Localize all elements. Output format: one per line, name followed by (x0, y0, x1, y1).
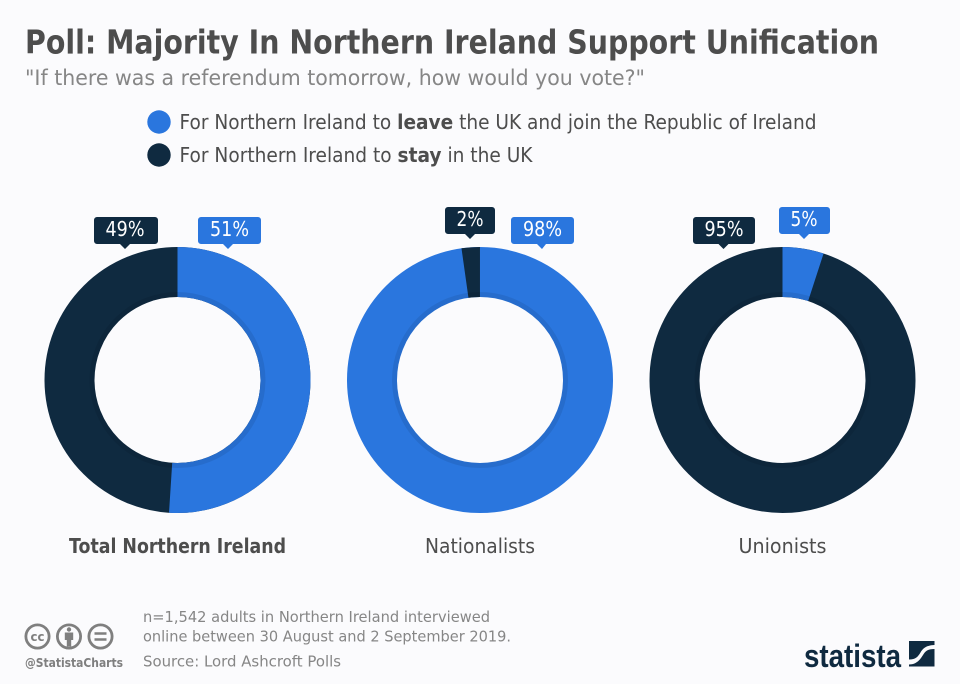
label: 5%: 5% (790, 207, 818, 231)
donut: Total Northern Ireland (69, 217, 286, 558)
legend item: stay: For Northern Ireland to stay in the UK (180, 143, 533, 167)
label: 5% (779, 207, 830, 239)
legend (147, 110, 817, 167)
source: Source: Lord Ashcroft Polls (143, 652, 341, 670)
note: online between 30 August and 2 September 2019. (143, 628, 511, 646)
label: 95% (693, 217, 755, 249)
logo mark (909, 641, 934, 666)
label: 2% (445, 207, 495, 239)
donut: Unionists (674, 207, 890, 558)
legend item: leave: For Northern Ireland to leave the UK and join the Republic of Ireland (180, 110, 816, 134)
label: 51% (198, 217, 261, 249)
icon: cc: cc (30, 629, 44, 644)
caption: Total Northern Ireland (69, 534, 286, 558)
label: 98% (511, 217, 574, 249)
label: 98%: 98% (523, 217, 562, 241)
donut: Nationalists (358, 207, 602, 558)
note: n=1,542 adults in Northern Ireland interviewed (143, 608, 490, 626)
subtitle: "If there was a referendum tomorrow, how would you vote?" (25, 66, 645, 91)
handle: @StatistaCharts (25, 656, 123, 670)
note (143, 608, 511, 670)
label: 95%: 95% (704, 217, 744, 241)
label: 51%: 51% (210, 217, 249, 241)
logo: statista: statista (804, 638, 901, 674)
icon: attribution (57, 625, 81, 648)
label: 2%: 2% (456, 207, 484, 231)
icon: no derivatives (89, 625, 112, 648)
label: 49%: 49% (106, 217, 144, 241)
caption: Nationalists (425, 534, 535, 558)
caption: Unionists (738, 534, 826, 558)
label: 49% (94, 217, 158, 249)
icon: creative commons licence (26, 625, 112, 648)
